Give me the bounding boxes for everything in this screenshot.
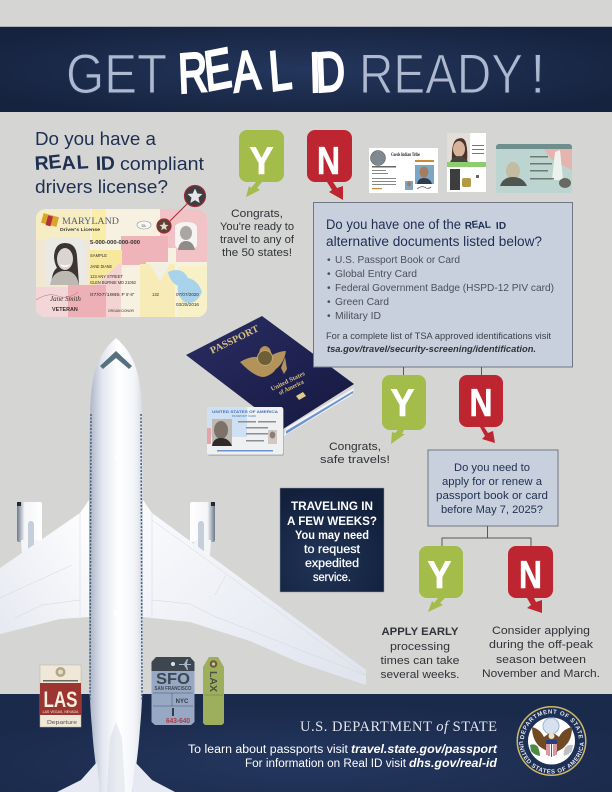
heading: REAL ID compliant license question: REAL ID bbox=[34, 151, 115, 175]
luggage tag: LAX bbox=[203, 657, 224, 725]
Y bubble: alternative documents bbox=[382, 375, 426, 444]
document image: PIV badge bbox=[447, 133, 486, 192]
Department of State seal bbox=[516, 706, 586, 776]
luggage tag: LAS: LAS bbox=[44, 687, 78, 712]
callout: traveling in a few weeks bbox=[280, 488, 384, 592]
passport book and card: PASSPORT bbox=[208, 323, 261, 357]
right wing bbox=[143, 500, 366, 685]
links: For information on Real ID visit bbox=[245, 758, 407, 770]
license data text: JANE DIANE bbox=[90, 264, 112, 269]
ghost portrait bbox=[175, 222, 197, 250]
Maryland REAL ID driver's license: Driver's License bbox=[60, 227, 100, 233]
callout: traveling in a few weeks: TRAVELING IN bbox=[291, 501, 373, 513]
list of documents: • bbox=[327, 283, 331, 294]
luggage tag: LAS bbox=[40, 665, 81, 727]
N bubble: alternative documents bbox=[459, 375, 503, 443]
panel: passport renewal question: before May 7, 2025? bbox=[441, 504, 543, 516]
main portrait bbox=[45, 238, 85, 285]
text: congrats 50 states: You're ready to bbox=[220, 221, 294, 233]
list of documents: • bbox=[327, 269, 331, 280]
text: congrats safe travels: Congrats, bbox=[329, 441, 381, 453]
Maryland REAL ID driver's license bbox=[36, 209, 207, 317]
list of documents: Green Card bbox=[335, 297, 389, 308]
callout: traveling in a few weeks: service. bbox=[313, 572, 351, 584]
text: off-peak advice: during the off-peak bbox=[489, 639, 593, 651]
text: off-peak advice bbox=[482, 625, 600, 680]
passport card: UNITED STATES OF AMERICA bbox=[212, 410, 278, 414]
cockpit windows bbox=[100, 351, 132, 369]
text: apply early: processing bbox=[390, 641, 450, 653]
heading: REAL ID compliant license question bbox=[34, 128, 204, 197]
list of documents bbox=[327, 255, 554, 322]
N bubble: off-peak bbox=[508, 546, 553, 613]
callout: traveling in a few weeks: A FEW WEEKS? bbox=[287, 516, 377, 528]
text: congrats 50 states: the 50 states! bbox=[222, 247, 292, 259]
text: congrats safe travels: safe travels! bbox=[320, 454, 390, 466]
Maryland flag crest bbox=[41, 213, 59, 227]
Department of State seal: DEPARTMENT OF STATE bbox=[520, 709, 583, 740]
list of documents: • bbox=[327, 255, 331, 266]
text: congrats 50 states: Congrats, bbox=[231, 208, 283, 220]
luggage tag: SFO: NYC bbox=[176, 699, 189, 705]
title banner: REAL ID bbox=[177, 37, 346, 106]
luggage tag: LAS: LAS VEGAS, NEVADA bbox=[43, 710, 79, 714]
footer text: department of state bbox=[188, 719, 498, 770]
connector lines under documents panel bbox=[404, 367, 482, 375]
panel: alternative documents: REAL ID bbox=[465, 219, 506, 232]
panel: alternative documents bbox=[314, 202, 572, 367]
links: dhs.gov/real-id bbox=[409, 758, 498, 770]
text: apply early: times can take bbox=[380, 655, 460, 667]
passport card: PASSPORT CARD bbox=[232, 414, 257, 418]
Maryland REAL ID driver's license: MARYLAND bbox=[62, 217, 119, 227]
license data text: ORGAN DONOR bbox=[108, 309, 134, 313]
text: congrats 50 states bbox=[220, 208, 295, 259]
Y bubble: apply early bbox=[419, 546, 463, 612]
links: To learn about passports visit bbox=[188, 744, 349, 756]
Y bubble: compliant license: Y bbox=[250, 140, 274, 183]
heading: REAL ID compliant license question: Do you have a bbox=[35, 128, 157, 149]
cabin windows bbox=[90, 414, 142, 700]
eagle emblem bbox=[240, 346, 287, 377]
heading: REAL ID compliant license question: drivers license? bbox=[35, 176, 168, 197]
list of documents: Military ID bbox=[335, 311, 381, 322]
panel: passport renewal question: Do you need to bbox=[454, 462, 530, 474]
list of documents: • bbox=[327, 311, 331, 322]
license data text: SAMPLE bbox=[90, 253, 107, 258]
panel: passport renewal question: apply for or renew a bbox=[442, 476, 543, 488]
license data text: 07/07/2020 bbox=[176, 292, 200, 297]
text: off-peak advice: November and March. bbox=[482, 668, 600, 680]
fuselage bbox=[89, 338, 143, 792]
license data text bbox=[50, 240, 200, 313]
N bubble: compliant license: N bbox=[317, 140, 340, 183]
N bubble: alternative documents: N bbox=[470, 382, 492, 425]
document image: green card bbox=[496, 144, 572, 193]
luggage tag: SFO bbox=[152, 657, 194, 725]
text: off-peak advice: season between bbox=[496, 654, 586, 666]
title banner: ! bbox=[530, 42, 546, 105]
left wing bbox=[0, 500, 89, 634]
license data text: GLEN BURNIE MD 21062 bbox=[90, 280, 137, 285]
text: congrats safe travels bbox=[320, 441, 390, 466]
license data text: 07/07/1985 F bbox=[90, 292, 126, 297]
passport card bbox=[207, 407, 284, 456]
panel: passport renewal question bbox=[428, 450, 558, 526]
luggage tag: LAX: LAX bbox=[207, 671, 219, 692]
list of documents: Federal Government Badge (HSPD-12 PIV card) bbox=[335, 283, 554, 294]
airplane illustration bbox=[0, 338, 366, 792]
luggage tag: SFO: 643-640 bbox=[166, 718, 190, 725]
panel: alternative documents: tsa.gov/travel/security-screening/identification. bbox=[327, 344, 536, 354]
callout: traveling in a few weeks: You may need bbox=[295, 530, 369, 542]
title banner bbox=[0, 26, 612, 112]
passport book and card: of America bbox=[278, 378, 306, 397]
text: apply early: several weeks. bbox=[380, 669, 460, 681]
license data text: 5'-8" bbox=[126, 292, 135, 297]
passport book and card bbox=[186, 316, 354, 456]
Maryland REAL ID driver's license: DL bbox=[141, 223, 147, 228]
list of documents: Global Entry Card bbox=[335, 269, 417, 280]
passport book and card: United States bbox=[270, 370, 307, 393]
document image: tribal ID card bbox=[369, 148, 438, 193]
title banner: GET bbox=[66, 42, 167, 105]
footer text: department of state: U.S. DEPARTMENT of STATE bbox=[300, 719, 497, 735]
list of documents: U.S. Passport Book or Card bbox=[335, 255, 460, 266]
list of documents: • bbox=[327, 297, 331, 308]
license data text: 132 bbox=[152, 292, 160, 297]
Y bubble: alternative documents: Y bbox=[390, 382, 414, 425]
links: travel.state.gov/passport bbox=[351, 744, 498, 756]
N bubble: off-peak: N bbox=[519, 554, 542, 597]
text: off-peak advice: Consider applying bbox=[492, 625, 590, 637]
callout: REAL ID star bbox=[157, 186, 206, 233]
footer banner bbox=[0, 694, 612, 792]
Y bubble: apply early: Y bbox=[428, 554, 452, 597]
callout: traveling in a few weeks: to request bbox=[304, 544, 361, 556]
text: apply early bbox=[380, 626, 460, 681]
text: congrats 50 states: travel to any of bbox=[220, 234, 295, 246]
right engine bbox=[190, 502, 215, 555]
title banner: READY bbox=[359, 42, 523, 105]
callout: traveling in a few weeks: expedited bbox=[305, 558, 359, 570]
license data text: Jane Smith bbox=[50, 295, 81, 303]
panel: alternative documents: For a complete list of TSA approved identifications visit bbox=[326, 331, 552, 341]
Y bubble: compliant license bbox=[239, 130, 284, 197]
license data text: 03/25/2016 bbox=[176, 302, 200, 307]
N bubble: compliant license bbox=[307, 130, 352, 200]
left engine bbox=[17, 502, 42, 555]
connector lines under renewal question bbox=[442, 526, 531, 546]
license data text: VETERAN bbox=[52, 307, 78, 313]
text: apply early: APPLY EARLY bbox=[382, 626, 459, 638]
panel: passport renewal question: passport book or card bbox=[436, 490, 548, 502]
links bbox=[188, 744, 498, 770]
document image: tribal ID card: Coeds Indian Tribe bbox=[391, 153, 421, 158]
panel: alternative documents: Do you have one of the bbox=[326, 217, 461, 232]
luggage tag: LAS: Departure bbox=[47, 720, 77, 726]
panel: alternative documents: alternative documents listed below? bbox=[326, 234, 542, 249]
license data text: 5-000-000-000-000 bbox=[90, 240, 140, 246]
luggage tag: SFO: SAN FRANCISCO bbox=[154, 686, 192, 692]
luggage tag: SFO: SFO bbox=[156, 671, 190, 688]
tailplanes bbox=[57, 762, 100, 792]
Department of State seal: UNITED STATES OF AMERICA bbox=[519, 742, 584, 774]
heading: REAL ID compliant license question: compliant bbox=[120, 153, 204, 174]
license data text: 123 ANY STREET bbox=[90, 274, 123, 279]
